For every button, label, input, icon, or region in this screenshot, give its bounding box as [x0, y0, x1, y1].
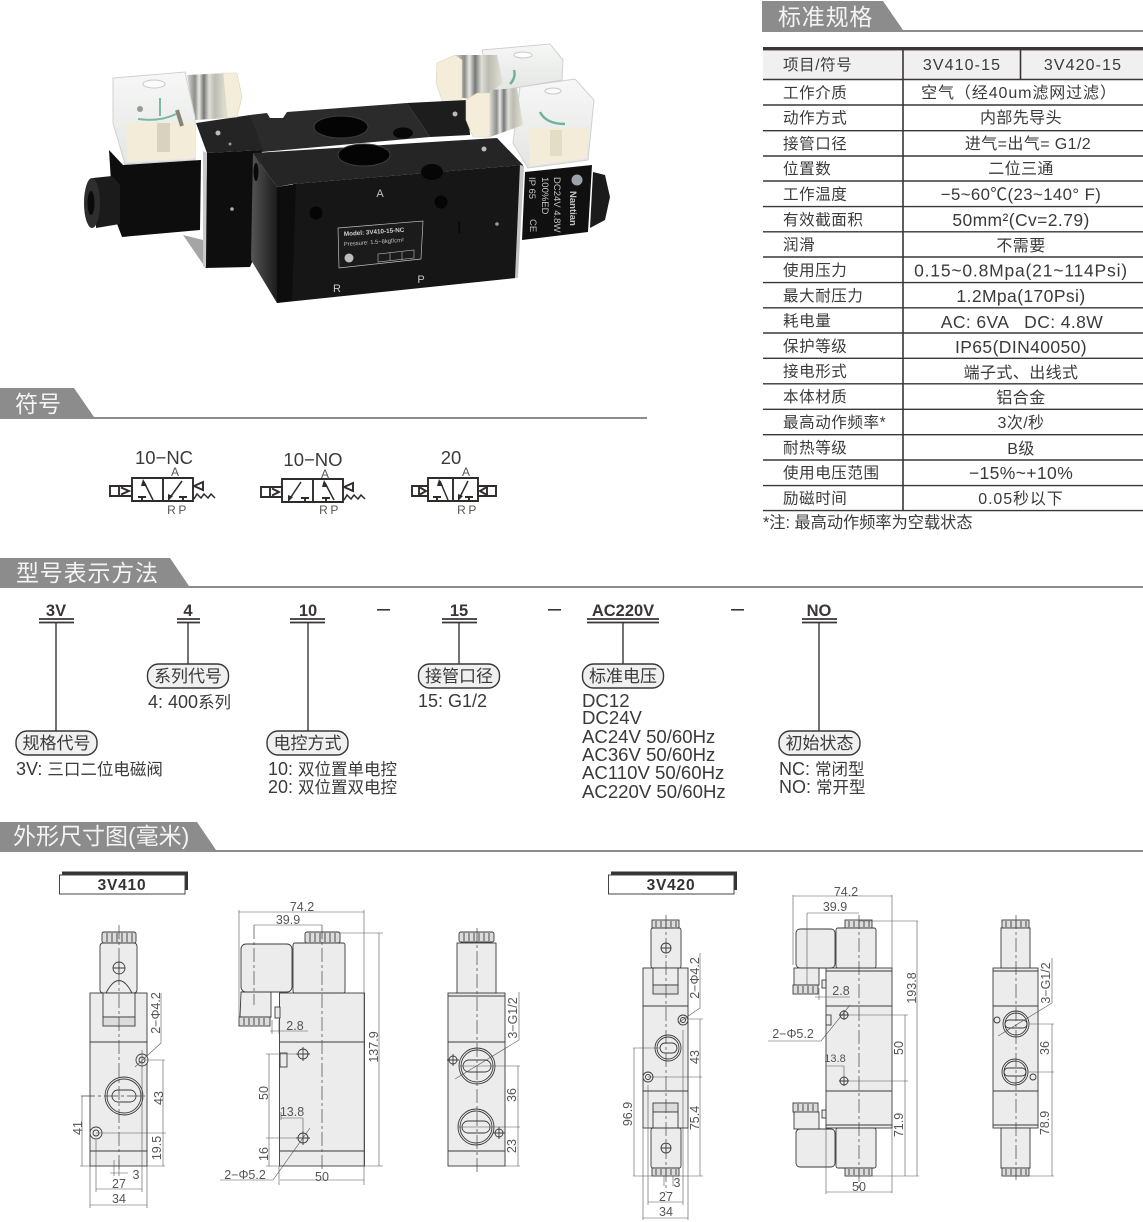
symbol: 20 — [412, 447, 496, 517]
nameplate: Model: 3V410-15-NC — [344, 227, 405, 238]
drawing: 3V410 rear view: 36 — [505, 1088, 519, 1102]
table row labels: 润滑 — [783, 236, 815, 254]
specification table — [763, 47, 1143, 532]
valve face lettering: P — [417, 274, 425, 286]
drawing: 3V410 front view: 19.5 — [150, 1136, 164, 1160]
drawing: 3V410 rear view: 3−G1/2 — [506, 997, 520, 1039]
table row values: 二位三通 — [988, 160, 1054, 178]
table row labels: 接电形式 — [783, 362, 847, 380]
section header: 外形尺寸图(毫米): 外形尺寸图(毫米) — [13, 823, 189, 849]
section header: 符号 — [0, 388, 647, 419]
model code: 4 系列代号 — [148, 602, 231, 712]
table row values: IP65(DIN40050) — [955, 337, 1087, 357]
table row values: 0.05秒以下 — [978, 490, 1064, 508]
model code: 15 接管口径: 接管口径 — [425, 667, 493, 686]
separator dash — [377, 609, 390, 611]
table row labels: 耗电量 — [783, 312, 831, 330]
table row values: 进气=出气= G1/2 — [965, 135, 1091, 153]
model code: NO 初始状态: 初始状态 — [786, 734, 854, 753]
front right solenoid: 100%ED — [539, 177, 550, 215]
model tag: 3V420: 3V420 — [647, 877, 695, 894]
drawing: 3V420 side view: 2−Φ5.2 — [772, 1027, 814, 1041]
model code: 3V 规格代号: 3V: 三口二位电磁阀 — [16, 759, 163, 779]
table row values: AC: 6VA DC: 4.8W — [941, 312, 1103, 332]
table row labels: 工作介质 — [783, 84, 847, 102]
symbol: 20: 20 — [441, 447, 461, 468]
nameplate — [338, 221, 423, 268]
drawing: 3V420 front view: 3 — [674, 1176, 681, 1190]
table row labels: 有效截面积 — [783, 211, 864, 229]
left solenoid with transparent connector — [84, 72, 242, 237]
model code: AC220V 标准电压: DC12 — [582, 690, 630, 711]
drawing: 3V410 side view: 50 — [257, 1086, 271, 1100]
model code: AC220V 标准电压: AC110V 50/60Hz — [582, 762, 724, 783]
table header row: 项目/符号 — [783, 56, 852, 74]
drawing: 3V420 side view: 2.8 — [832, 984, 850, 998]
model code: AC220V 标准电压: AC24V 50/60Hz — [582, 726, 715, 747]
table row labels — [783, 84, 886, 508]
model code: AC220V 标准电压: AC220V 50/60Hz — [582, 781, 726, 802]
separator dash — [731, 609, 744, 611]
model code: 3V 规格代号: 3V — [46, 602, 66, 620]
drawing: 3V420 front view: 34 — [659, 1205, 673, 1219]
section header: 型号表示方法 — [0, 558, 1143, 588]
valve face lettering — [333, 188, 425, 295]
model tag: 3V410: 3V410 — [98, 877, 146, 894]
drawing: 3V410 rear view — [447, 928, 520, 1172]
drawing: 3V410 side view — [220, 900, 383, 1185]
model code: 10 电控方式 — [267, 602, 397, 797]
table row labels: 最高动作频率* — [783, 414, 886, 432]
model code: 15 接管口径 — [418, 602, 500, 711]
drawing: 3V420 front view: 75.4 — [688, 1106, 702, 1130]
separator dash — [548, 609, 561, 611]
table footnote: *注: 最高动作频率为空载状态 — [763, 514, 973, 532]
front right solenoid: CE — [527, 219, 538, 232]
drawing: 3V420 front view: 43 — [688, 1050, 702, 1064]
table header row — [763, 47, 1143, 79]
model code: AC220V 标准电压 — [582, 602, 726, 802]
valve face lettering: A — [376, 188, 384, 200]
drawing: 3V420 front view: 27 — [659, 1190, 673, 1204]
front right solenoid: IP 65 — [526, 177, 537, 199]
valve face lettering: R — [333, 283, 341, 295]
model code: 4 系列代号: 4: 400系列 — [148, 692, 231, 712]
model code: AC220V 标准电压: 标准电压 — [589, 667, 657, 686]
model code: AC220V 标准电压: AC36V 50/60Hz — [582, 744, 715, 765]
drawing: 3V410 side view: 74.2 — [290, 900, 314, 914]
model code: 4 系列代号: 4 — [183, 602, 193, 620]
table row values: 50mm²(Cv=2.79) — [952, 210, 1090, 230]
model code: NO 初始状态: NC: 常闭型 — [779, 759, 864, 779]
table grid lines — [763, 47, 1143, 511]
table row labels: 励磁时间 — [783, 490, 847, 508]
table row values — [914, 84, 1128, 508]
model code: 3V 规格代号 — [16, 602, 163, 779]
section header: 符号: 符号 — [15, 391, 61, 417]
drawing: 3V420 rear view — [993, 915, 1054, 1180]
model code: 3V 规格代号: 规格代号 — [22, 734, 90, 753]
table row values: −5~60℃(23~140° F) — [941, 185, 1101, 204]
table row labels: 使用压力 — [783, 262, 847, 280]
symbol: 10-NO: RP — [319, 503, 341, 517]
drawing: 3V410 side view: 39.9 — [276, 913, 300, 927]
drawing: 3V420 rear view: 36 — [1038, 1041, 1052, 1055]
drawing: 3V410 side view: 2−Φ5.2 — [224, 1168, 266, 1182]
table row labels: 动作方式 — [783, 109, 847, 127]
model code: 15 接管口径: 15 — [450, 602, 468, 620]
drawing: 3V420 rear view: 78.9 — [1038, 1111, 1052, 1135]
table row values: 0.15~0.8Mpa(21~114Psi) — [914, 260, 1128, 280]
drawing: 3V410 front view: 27 — [112, 1177, 126, 1191]
model code: 10 电控方式: 20: 双位置双电控 — [268, 777, 397, 797]
drawing: 3V420 side view: 50 — [852, 1180, 866, 1194]
drawing: 3V420 front view — [621, 915, 703, 1220]
model tag: 3V420 — [608, 872, 737, 894]
table row labels: 保护等级 — [783, 338, 847, 356]
front right connector — [466, 79, 594, 168]
drawing: 3V410 front view: 2−Φ4.2 — [149, 992, 163, 1034]
model code: AC220V 标准电压: DC24V — [582, 707, 643, 728]
drawing: 3V410 side view: 137.9 — [367, 1031, 381, 1063]
section header: 外形尺寸图(毫米) — [0, 822, 1143, 852]
rear valve body — [183, 100, 470, 268]
table row labels: 位置数 — [783, 160, 831, 178]
model code: NO 初始状态: NO: 常开型 — [779, 777, 866, 797]
symbol: 20: RP — [457, 503, 479, 517]
table row values: 3次/秒 — [998, 414, 1044, 432]
drawing: 3V420 side view: 71.9 — [892, 1113, 906, 1137]
drawing: 3V410 front view: 43 — [152, 1091, 166, 1105]
front right solenoid — [522, 165, 610, 240]
table row labels: 本体材质 — [783, 388, 847, 406]
table row values: 空气（经40um滤网过滤） — [921, 84, 1117, 102]
drawing: 3V410 front view — [71, 925, 166, 1208]
model code: 10 电控方式: 10 — [299, 602, 317, 620]
table header row: 3V420-15 — [1044, 57, 1122, 74]
symbol: 10-NC: 10−NC — [135, 447, 193, 468]
drawing: 3V410 front view: 41 — [71, 1121, 85, 1135]
table row labels: 接管口径 — [783, 135, 847, 153]
drawing: 3V410 side view: 2.8 — [286, 1019, 304, 1033]
drawing: 3V410 side view: 50 — [315, 1170, 329, 1184]
table row labels: 使用电压范围 — [783, 464, 880, 482]
drawing: 3V420 side view: 74.2 — [834, 885, 858, 899]
drawing: 3V410 side view: 13.8 — [280, 1105, 304, 1119]
drawing: 3V410 side view: 16 — [257, 1147, 271, 1161]
drawing: 3V410 front view: 3 — [133, 1168, 140, 1182]
drawing: 3V420 side view: 193.8 — [905, 972, 919, 1004]
symbol: 10-NC — [110, 447, 215, 517]
model code: 10 电控方式: 电控方式 — [274, 734, 342, 753]
table row values: 1.2Mpa(170Psi) — [956, 286, 1086, 306]
front right solenoid: Nantian — [567, 191, 578, 226]
model code: AC220V 标准电压: AC220V — [592, 602, 654, 620]
symbol: 10-NC: A — [171, 465, 179, 479]
symbol: 20: A — [462, 465, 470, 479]
model code: 15 接管口径: 15: G1/2 — [418, 691, 487, 711]
drawing: 3V410 front view: 34 — [112, 1192, 126, 1206]
symbol: 10-NO: 10−NO — [283, 449, 343, 470]
table row values: 铝合金 — [996, 389, 1046, 407]
table header row: 3V410-15 — [923, 57, 1001, 74]
drawing: 3V420 front view: 2−Φ4.2 — [688, 957, 702, 999]
nameplate: Pressure: 1.5~8kgf/cm² — [344, 238, 404, 248]
table row labels: 耐热等级 — [783, 439, 847, 457]
drawing: 3V420 side view — [768, 885, 919, 1194]
symbol: 10-NO: A — [321, 467, 329, 481]
section header: 标准规格 — [762, 1, 1143, 32]
table row labels: 最大耐压力 — [783, 287, 864, 305]
section header: 标准规格: 标准规格 — [778, 4, 873, 30]
table row values: B级 — [1007, 440, 1035, 458]
front right solenoid: DC24V 4.8W — [551, 177, 562, 232]
symbol: 10-NO — [261, 449, 365, 517]
model tag: 3V410 — [60, 872, 188, 894]
table row values: 端子式、出线式 — [964, 364, 1078, 382]
section header: 型号表示方法: 型号表示方法 — [16, 560, 159, 586]
drawing: 3V420 side view: 39.9 — [823, 900, 847, 914]
front valve body — [251, 138, 524, 303]
table row labels: 工作温度 — [783, 186, 847, 204]
rear right connector — [436, 44, 563, 103]
drawing: 3V420 side view: 50 — [892, 1041, 906, 1055]
drawing: 3V420 front view: 96.9 — [621, 1102, 635, 1126]
model code: 4 系列代号: 系列代号 — [154, 667, 222, 686]
product photo: twin solenoid valves — [84, 44, 610, 303]
table row values: 不需要 — [996, 237, 1046, 255]
drawing: 3V420 side view: 13.8 — [824, 1053, 846, 1065]
model code: NO 初始状态 — [779, 602, 866, 797]
table row values: 内部先导头 — [980, 109, 1062, 127]
model code: NO 初始状态: NO — [807, 602, 832, 620]
drawing: 3V410 rear view: 23 — [505, 1139, 519, 1153]
symbol: 10-NC: RP — [167, 503, 189, 517]
model code: 10 电控方式: 10: 双位置单电控 — [268, 759, 397, 779]
drawing: 3V420 rear view: 3−G1/2 — [1039, 962, 1053, 1004]
table row values: −15%~+10% — [969, 463, 1073, 483]
